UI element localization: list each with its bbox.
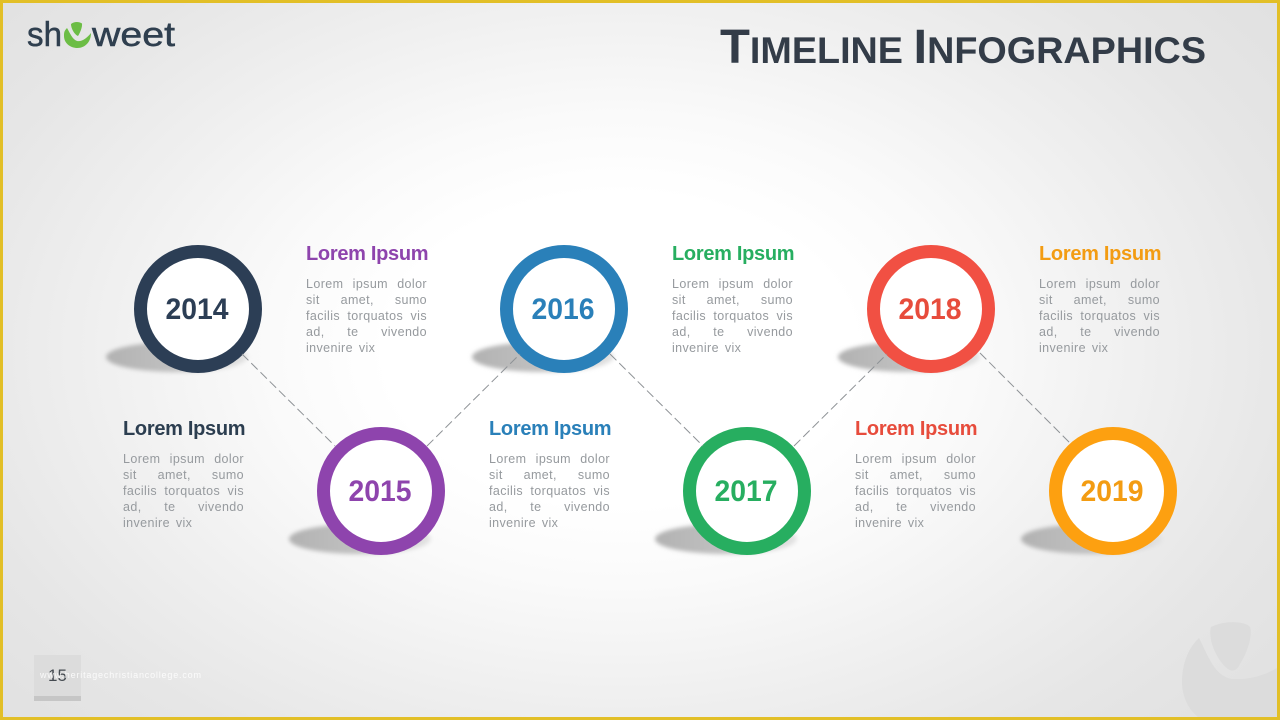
title: TIMELINE INFOGRAPHICS <box>720 21 1206 74</box>
text block: 2016: ad, te vivendo <box>489 500 610 514</box>
page number box <box>34 655 81 701</box>
node 2015: 2015 <box>348 475 412 508</box>
text block: 2018: Lorem ipsum dolor <box>855 452 976 466</box>
node 2018 <box>838 252 988 372</box>
text block: 2016: Lorem Ipsum <box>489 418 611 440</box>
text block: 2016: facilis torquatos vis <box>489 484 610 498</box>
text block: 2019: invenire vix <box>1039 341 1108 355</box>
text block: 2016 <box>489 418 611 530</box>
text block: 2016: sit amet, sumo <box>489 468 610 482</box>
text block: 2014 <box>123 418 245 530</box>
text block: 2014: sit amet, sumo <box>123 468 244 482</box>
text block: 2019: Lorem Ipsum <box>1039 243 1161 265</box>
node 2017 <box>655 434 804 554</box>
text block: 2019: Lorem ipsum dolor <box>1039 277 1160 291</box>
text block: 2017: invenire vix <box>672 341 741 355</box>
watermark icon <box>1182 622 1277 717</box>
node 2016 <box>472 252 622 372</box>
text block: 2014: facilis torquatos vis <box>123 484 244 498</box>
text block: 2014: invenire vix <box>123 516 192 530</box>
text block: 2018: sit amet, sumo <box>855 468 976 482</box>
dashed connectors <box>242 353 1071 446</box>
logo: weet <box>91 16 176 54</box>
text block: 2019: facilis torquatos vis <box>1039 309 1160 323</box>
text block: 2018 <box>855 418 977 530</box>
text block: 2018: ad, te vivendo <box>855 500 976 514</box>
text block: 2017: Lorem Ipsum <box>672 243 794 265</box>
logo <box>27 16 176 54</box>
text block: 2019 <box>1039 243 1161 355</box>
text block: 2015: Lorem Ipsum <box>306 243 428 265</box>
text block: 2014: Lorem Ipsum <box>123 418 245 440</box>
node 2018: 2018 <box>898 293 962 326</box>
text block: 2019: ad, te vivendo <box>1039 325 1160 339</box>
text block: 2017: Lorem ipsum dolor <box>672 277 793 291</box>
node 2015 <box>289 434 438 554</box>
text block: 2019: sit amet, sumo <box>1039 293 1160 307</box>
text block: 2017: facilis torquatos vis <box>672 309 793 323</box>
text block: 2015: facilis torquatos vis <box>306 309 427 323</box>
text block: 2017 <box>672 243 794 355</box>
node 2019 <box>1021 434 1170 554</box>
text block: 2018: facilis torquatos vis <box>855 484 976 498</box>
node 2016: 2016 <box>532 293 594 326</box>
node 2014: 2014 <box>166 293 229 326</box>
logo: sh <box>27 16 62 54</box>
text block: 2015: sit amet, sumo <box>306 293 427 307</box>
text block: 2014: Lorem ipsum dolor <box>123 452 244 466</box>
page number box: 15 <box>48 666 67 685</box>
text block: 2015: invenire vix <box>306 341 375 355</box>
text block: 2017: ad, te vivendo <box>672 325 793 339</box>
text block: 2018: invenire vix <box>855 516 924 530</box>
text block: 2017: sit amet, sumo <box>672 293 793 307</box>
node 2019: 2019 <box>1080 475 1144 508</box>
text block: 2015 <box>306 243 428 355</box>
text block: 2015: Lorem ipsum dolor <box>306 277 427 291</box>
text block: 2015: ad, te vivendo <box>306 325 427 339</box>
text block: 2018: Lorem Ipsum <box>855 418 977 440</box>
text block: 2014: ad, te vivendo <box>123 500 244 514</box>
node 2014 <box>106 252 256 372</box>
text block: 2016: invenire vix <box>489 516 558 530</box>
node 2017: 2017 <box>714 475 778 508</box>
website watermark text: www.heritagechristiancollege.com <box>39 670 201 680</box>
text block: 2016: Lorem ipsum dolor <box>489 452 610 466</box>
